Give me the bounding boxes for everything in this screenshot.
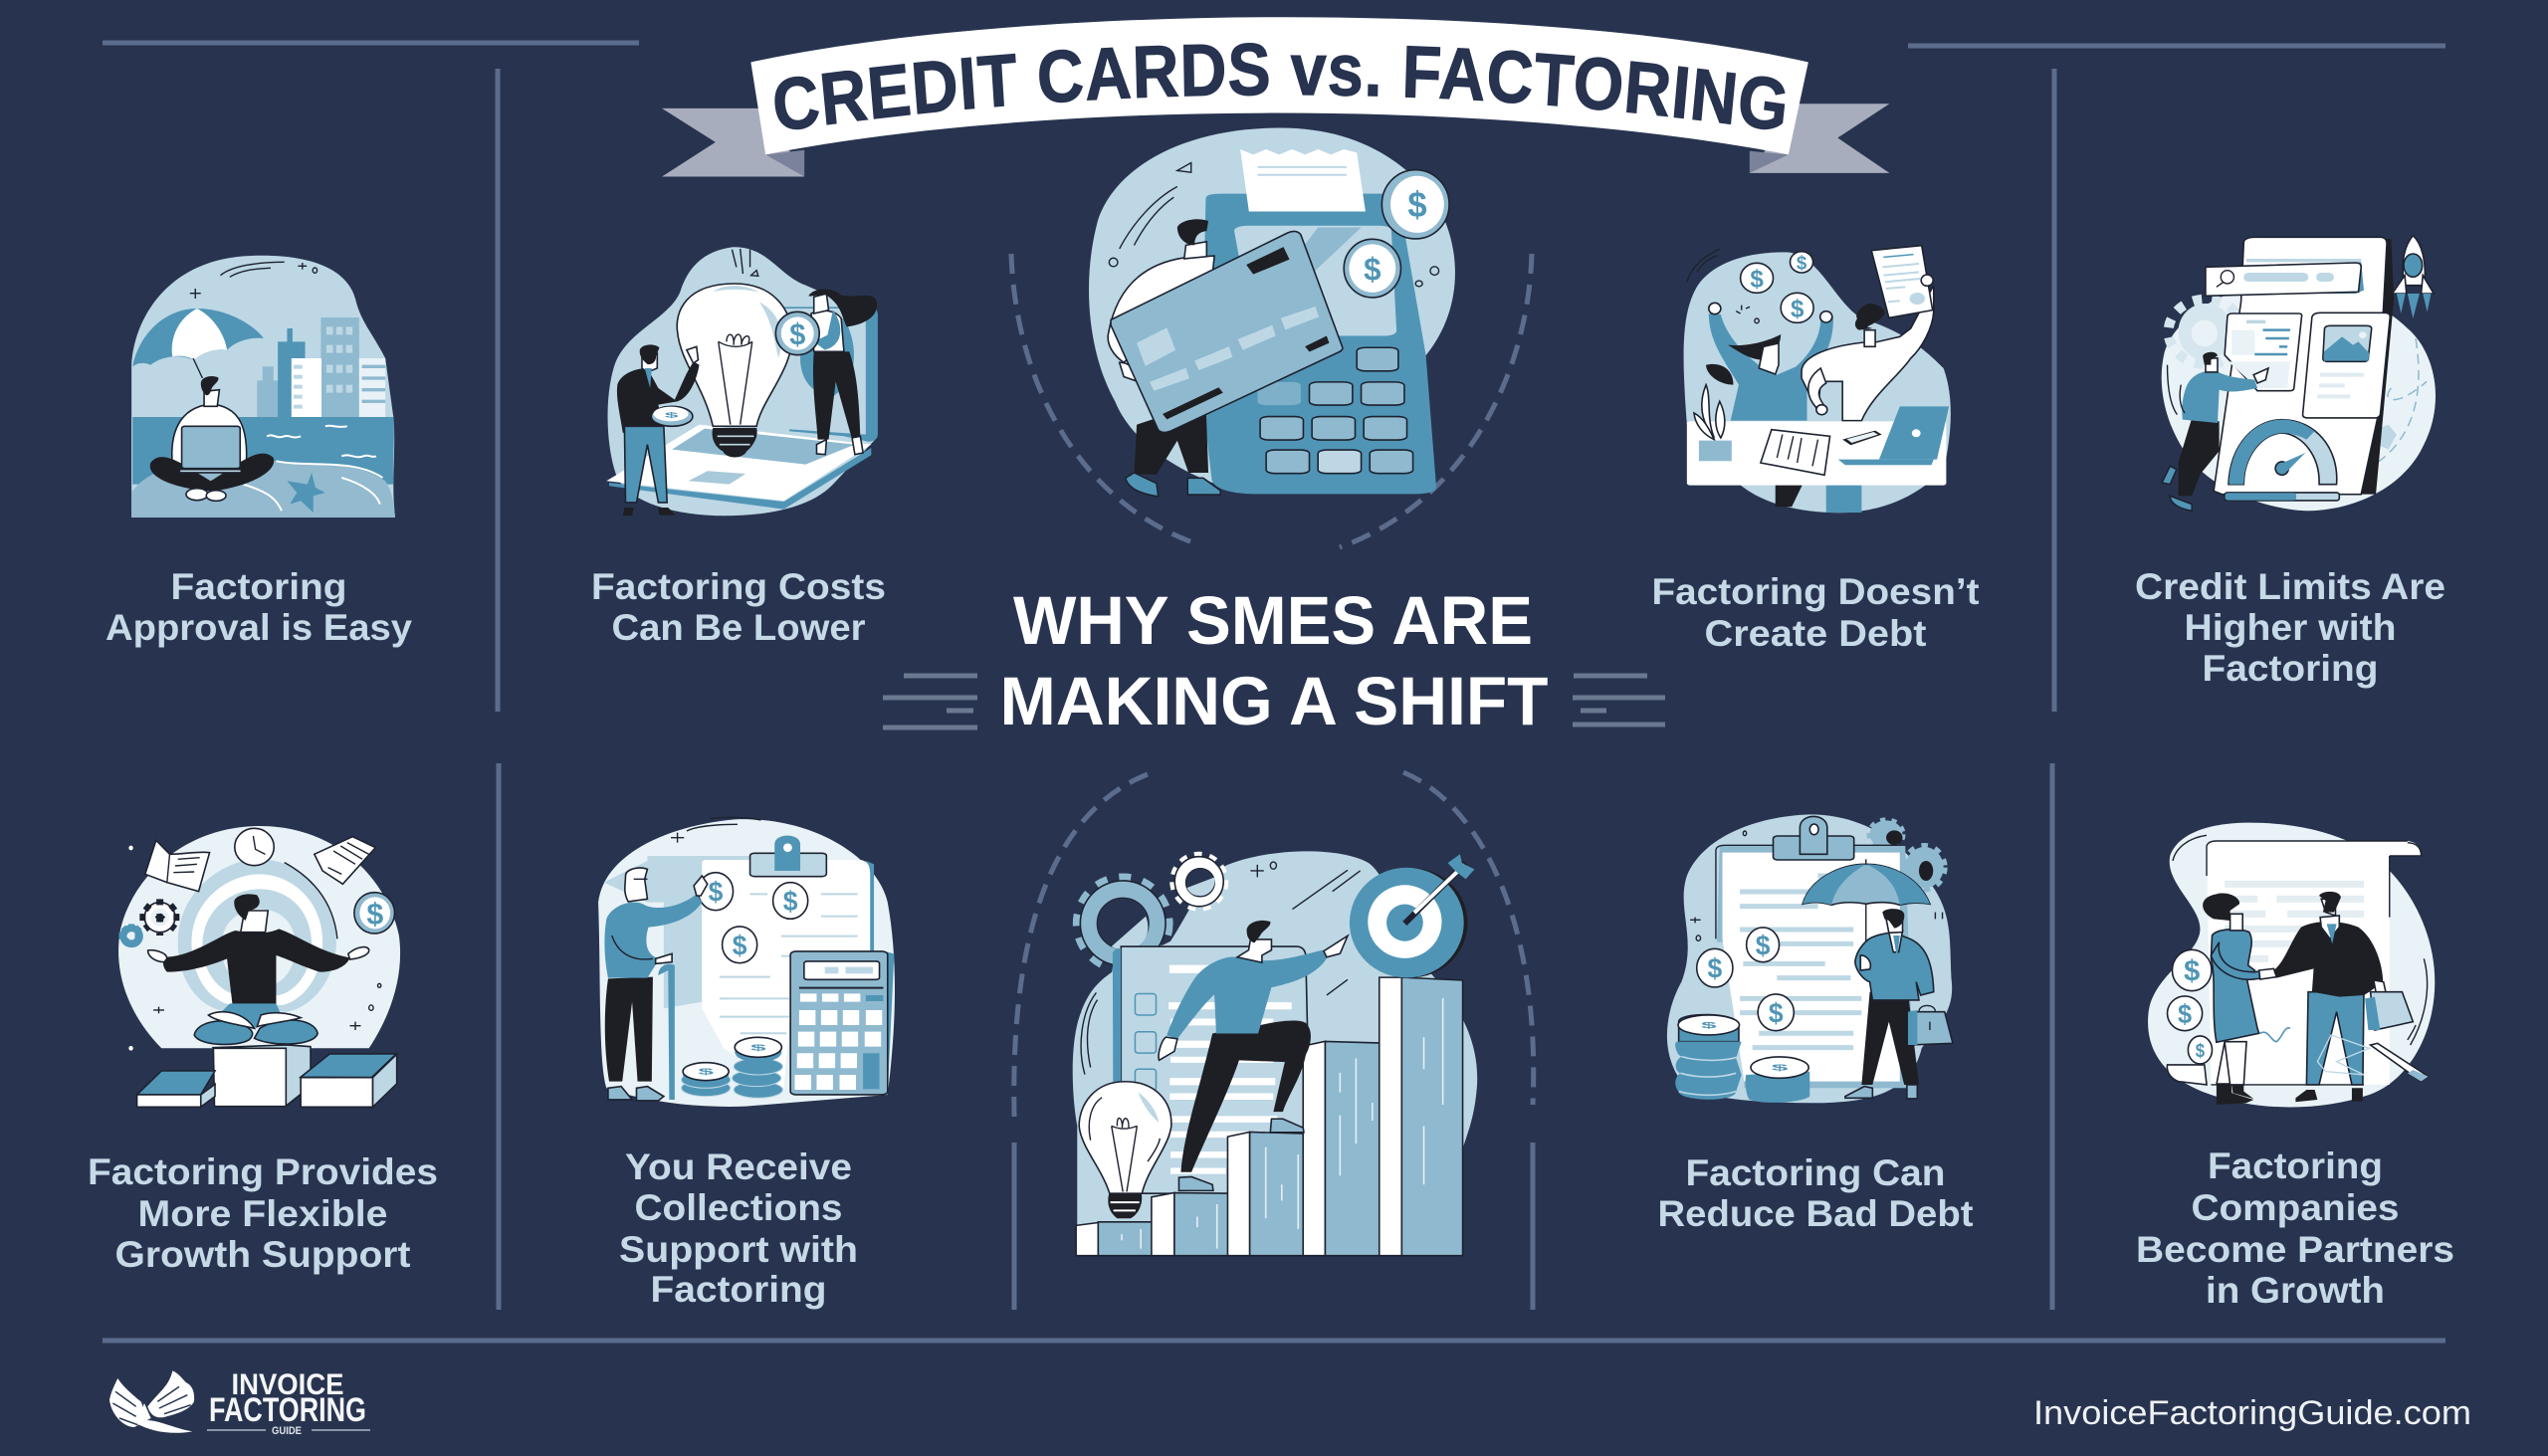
labels: bottom row: Support with — [619, 1229, 858, 1270]
illustration: credit limit dashboard with rocket — [2162, 236, 2436, 511]
illustration: business handshake: $ — [2184, 954, 2200, 988]
labels: top row: Factoring Doesn’t — [1652, 571, 1979, 612]
labels: top row: Factoring — [2202, 648, 2379, 689]
illustration: meditating person: $ — [366, 898, 383, 931]
labels: top row — [106, 566, 2445, 689]
illustration: clipboard with umbrella: $ — [1701, 1021, 1717, 1030]
illustration: climbing growth bars to target — [1073, 851, 1477, 1256]
labels: top row: Factoring — [171, 566, 346, 607]
illustration: center credit card and payment terminal: $ — [1364, 251, 1381, 288]
illustration: light bulb and laptop — [606, 247, 878, 516]
title banner — [662, 17, 1889, 177]
logo: Invoice Factoring Guide: GUIDE — [272, 1425, 302, 1437]
illustration: elderly man with clipboard and calculator: $ — [750, 1043, 766, 1052]
illustration: elderly man with clipboard and calculator: $ — [709, 876, 723, 908]
illustration: center credit card and payment terminal — [1089, 128, 1455, 497]
center heading: WHY SMES ARE — [1013, 582, 1533, 659]
logo: Invoice Factoring Guide: FACTORING — [209, 1391, 366, 1429]
illustration: beach laptop — [131, 256, 395, 518]
center heading: MAKING A SHIFT — [999, 663, 1549, 739]
illustration: business handshake: $ — [2178, 998, 2193, 1029]
labels: top row: Create Debt — [1704, 613, 1927, 654]
labels: top row: Can Be Lower — [611, 607, 866, 648]
labels: top row: Higher with — [2184, 607, 2397, 648]
labels: bottom row: Factoring — [2208, 1145, 2383, 1186]
illustration: clipboard with umbrella: $ — [1756, 930, 1770, 960]
labels: bottom row: Companies — [2192, 1187, 2399, 1228]
website url: InvoiceFactoringGuide.com — [2033, 1394, 2471, 1432]
logo: Invoice Factoring Guide: INVOICE — [231, 1368, 344, 1401]
illustration: celebrating team at desk: $ — [1791, 296, 1805, 322]
center heading — [883, 582, 1665, 739]
labels: bottom row — [88, 1145, 2454, 1311]
illustration: clipboard with umbrella: $ — [1772, 1063, 1788, 1073]
illustration: celebrating team at desk: $ — [1750, 266, 1764, 293]
illustration: elderly man with clipboard and calculator — [598, 817, 895, 1107]
labels: bottom row: Reduce Bad Debt — [1658, 1193, 1973, 1234]
illustration: clipboard with umbrella: $ — [1707, 952, 1722, 984]
labels: bottom row: More Flexible — [137, 1193, 388, 1234]
illustration: clipboard with umbrella — [1667, 814, 1953, 1103]
illustration: business handshake: $ — [2196, 1040, 2205, 1061]
illustration: business handshake — [2148, 823, 2435, 1107]
logo: Invoice Factoring Guide — [109, 1368, 370, 1437]
title banner: CREDIT CARDS vs. FACTORING — [774, 43, 1786, 129]
illustration: meditating person — [118, 826, 400, 1107]
illustration: elderly man with clipboard and calculator: $ — [698, 1067, 715, 1077]
labels: top row: Factoring Costs — [591, 566, 886, 607]
labels: bottom row: Growth Support — [115, 1234, 410, 1275]
illustration: elderly man with clipboard and calculator: $ — [783, 885, 798, 917]
labels: top row: Approval is Easy — [106, 607, 412, 648]
illustration: clipboard with umbrella: $ — [1769, 997, 1784, 1028]
labels: bottom row: in Growth — [2206, 1270, 2385, 1311]
labels: top row: Credit Limits Are — [2135, 566, 2445, 607]
labels: bottom row: Factoring Provides — [88, 1151, 438, 1192]
illustration: center credit card and payment terminal: $ — [1407, 186, 1427, 225]
labels: bottom row: Factoring Can — [1686, 1152, 1945, 1193]
labels: bottom row: Factoring — [651, 1269, 826, 1310]
illustration: celebrating team at desk — [1684, 246, 1951, 513]
labels: bottom row: You Receive — [625, 1146, 852, 1187]
illustration: elderly man with clipboard and calculator: $ — [733, 930, 747, 960]
labels: bottom row: Collections — [635, 1187, 842, 1228]
illustration: light bulb and laptop: $ — [789, 317, 806, 351]
illustration: celebrating team at desk: $ — [1797, 253, 1807, 274]
illustration: light bulb and laptop: $ — [665, 411, 678, 419]
labels: bottom row: Become Partners — [2136, 1229, 2454, 1270]
